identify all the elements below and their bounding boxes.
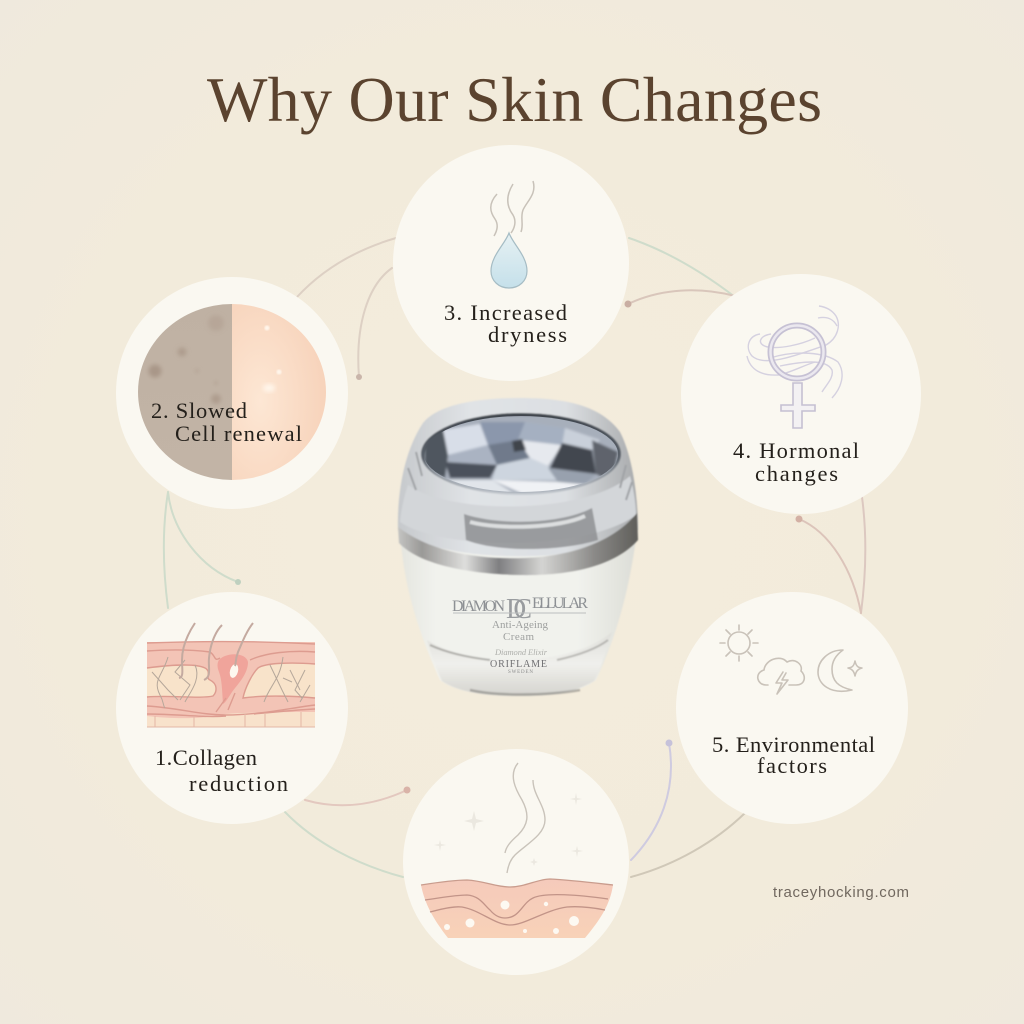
jar label text: Cream	[503, 631, 534, 643]
website credit: traceyhocking.com	[773, 884, 909, 901]
label: slowed cell renewal	[151, 398, 302, 446]
label: slowed cell renewal: Cell renewal	[175, 421, 302, 446]
label: increased dryness	[444, 300, 567, 347]
label: collagen reduction: 1.Collagen	[155, 745, 257, 770]
label: hormonal changes	[733, 438, 859, 486]
panel: bottom skin layers	[403, 749, 629, 975]
jar label text: DIAMON	[452, 598, 505, 615]
jar label text: SWEDEN	[508, 670, 533, 675]
panel: 5 environmental factors	[676, 592, 908, 824]
jar label text: DC	[506, 594, 532, 625]
jar label text	[452, 594, 588, 675]
illustration: skin cross-section with vapour	[421, 763, 613, 938]
label: environmental factors: 5. Environmental	[712, 732, 875, 757]
product jar	[398, 398, 638, 696]
infographic canvas	[116, 76, 921, 975]
panel: 4 hormonal changes	[681, 274, 921, 514]
title: Why Our Skin Changes	[207, 64, 822, 135]
label: hormonal changes: 4. Hormonal	[733, 438, 859, 463]
jar label text: Anti-Ageing	[492, 619, 548, 631]
label: collagen reduction: reduction	[189, 771, 288, 796]
panel: 1 collagen reduction	[116, 592, 348, 824]
label: slowed cell renewal: 2. Slowed	[151, 398, 247, 423]
jar label text: ELLULAR	[532, 595, 588, 612]
label: environmental factors: factors	[757, 753, 827, 778]
panel: 3 increased dryness	[393, 145, 629, 381]
label: increased dryness: 3. Increased	[444, 300, 567, 325]
panel: 2 slowed cell renewal	[116, 277, 348, 509]
illustration: skin cross-section with collagen fibres	[147, 623, 315, 727]
jar label text: Diamond Elixir	[494, 647, 548, 657]
diamond facets	[425, 415, 620, 497]
icon: female symbol with swirling lines	[747, 306, 842, 428]
icon: sun, storm cloud and moon	[720, 625, 862, 694]
label: collagen reduction	[155, 745, 288, 796]
icon: water drop with vapour	[491, 181, 534, 288]
label: environmental factors	[712, 732, 875, 778]
jar lid	[398, 398, 638, 575]
illustration: aged and fresh skin comparison	[138, 304, 326, 480]
label: increased dryness: dryness	[488, 322, 567, 347]
connecting arrows	[164, 238, 865, 877]
jar label text: ORIFLAME	[490, 659, 547, 670]
label: hormonal changes: changes	[755, 461, 838, 486]
jar body	[400, 530, 637, 696]
